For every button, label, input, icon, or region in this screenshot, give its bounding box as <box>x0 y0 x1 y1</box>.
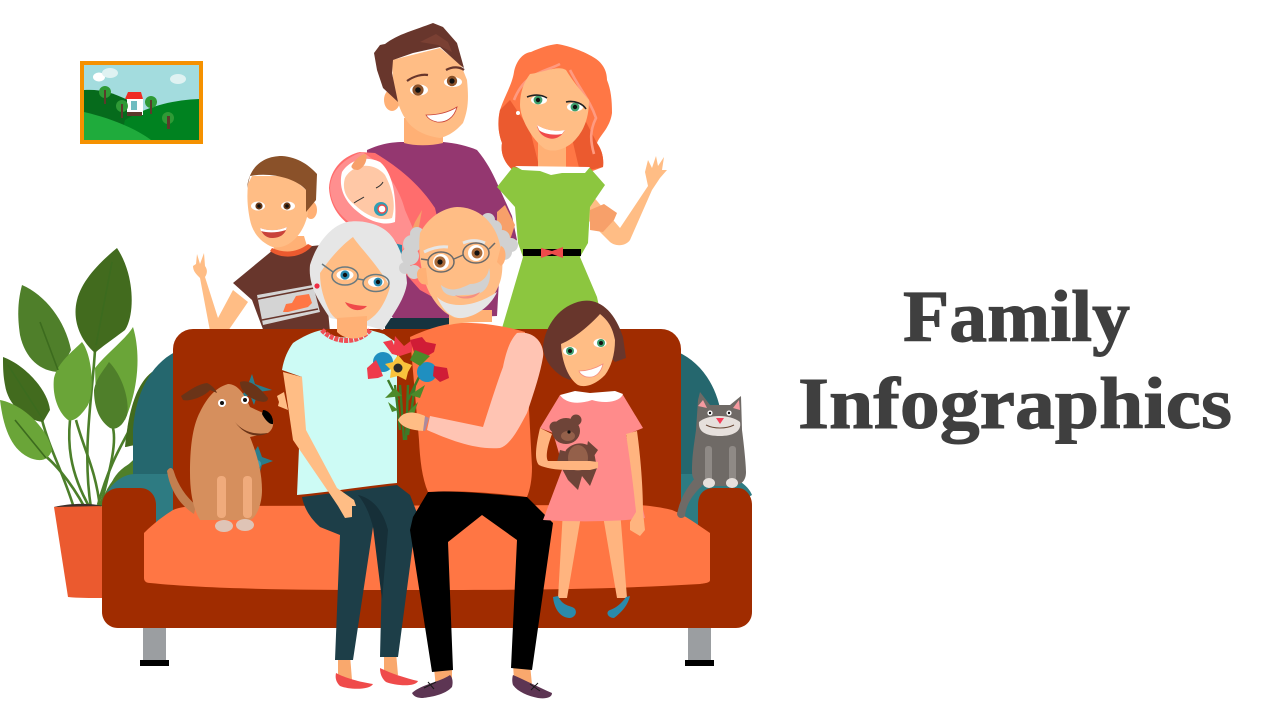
girl left arm <box>536 428 598 470</box>
father pants band <box>385 318 449 332</box>
boy mouth <box>260 227 287 238</box>
boy eyes <box>251 202 295 210</box>
girl hair back <box>543 301 626 380</box>
grandmother shoes <box>336 668 418 689</box>
cat muzzle <box>699 416 740 436</box>
grandmother <box>277 221 418 689</box>
grandfather neck <box>449 310 492 325</box>
dog tail <box>167 468 196 514</box>
boy hair <box>247 156 317 212</box>
teddy bear <box>550 414 598 490</box>
grandfather ankles <box>434 664 532 688</box>
grandmother glasses <box>322 264 389 292</box>
dog <box>167 374 273 532</box>
father hand on baby <box>405 210 422 250</box>
grandfather shoes <box>412 675 552 698</box>
grandfather <box>399 207 553 698</box>
baby wrap <box>329 152 455 300</box>
father hair <box>374 23 464 102</box>
grandfather hand and bouquet <box>367 336 449 440</box>
grandmother shirt <box>282 330 397 495</box>
grandfather hand behind grandmother <box>277 392 288 410</box>
sofa frame <box>102 329 752 666</box>
girl collar <box>560 391 623 403</box>
left leg <box>140 628 169 666</box>
girl eyes <box>563 338 606 356</box>
girl shoes <box>553 596 630 618</box>
grandfather ears <box>417 246 506 285</box>
grandfather moustache <box>441 268 490 296</box>
girl dress <box>540 395 645 521</box>
dog toys <box>238 374 273 478</box>
father face <box>392 48 468 138</box>
flowers <box>367 336 449 382</box>
grandfather arm <box>427 333 543 448</box>
grandfather cuff <box>416 414 429 431</box>
grandfather pants <box>410 492 553 672</box>
grandmother arm <box>283 372 356 518</box>
mother belt <box>523 247 581 258</box>
grandfather head <box>419 207 502 318</box>
father ear <box>384 89 400 111</box>
sofa seat <box>144 505 710 590</box>
grandmother pants <box>302 485 417 660</box>
dog face <box>218 396 273 435</box>
girl face <box>561 314 615 386</box>
dog ears <box>181 381 268 402</box>
sofa back <box>173 329 681 569</box>
mother eyes <box>516 95 586 115</box>
baby head <box>341 159 395 224</box>
bouquet stems <box>388 375 420 440</box>
sofa back cushions teal <box>107 352 752 525</box>
grandmother lips <box>345 302 367 310</box>
mother neck <box>538 136 566 168</box>
grandmother necklace <box>322 330 370 340</box>
boy neck <box>272 236 307 253</box>
mother dress <box>497 167 605 335</box>
boy ear <box>305 201 317 219</box>
mother hair <box>498 44 612 172</box>
boy arm <box>193 253 248 331</box>
left arm <box>102 488 156 570</box>
title: Infographics <box>798 363 1232 444</box>
mother raised arm <box>586 156 667 245</box>
father neck <box>404 118 443 145</box>
baby <box>329 152 455 300</box>
father shirt <box>365 142 517 318</box>
grandfather eyes and glasses <box>421 241 495 272</box>
boy head <box>247 176 308 247</box>
picture frame <box>80 61 203 144</box>
shirt stripe <box>257 285 320 325</box>
girl right arm <box>626 431 645 536</box>
cat <box>677 392 746 518</box>
cat face <box>706 410 734 428</box>
girl legs <box>558 510 627 598</box>
baby pacifier <box>354 182 388 216</box>
mother smile <box>537 125 565 139</box>
grandmother face <box>320 237 390 324</box>
girl <box>536 301 645 618</box>
dog body <box>190 384 273 520</box>
grandfather side hair <box>399 213 518 279</box>
cat legs <box>703 446 738 488</box>
grandfather vest <box>410 323 532 497</box>
right arm <box>698 488 752 570</box>
boy <box>193 156 330 332</box>
father <box>365 23 517 332</box>
grandfather beard <box>437 292 497 318</box>
grandmother legs <box>338 652 398 680</box>
mother face <box>520 68 589 151</box>
title <box>798 276 1232 444</box>
girl smile <box>579 364 603 377</box>
hand <box>398 413 425 431</box>
sofa base <box>102 560 752 628</box>
mother <box>497 44 667 335</box>
boy shirt <box>233 245 330 332</box>
father smile <box>426 107 457 122</box>
father eyes <box>407 67 464 96</box>
cat body <box>692 392 746 486</box>
dog legs <box>215 476 254 532</box>
right leg <box>685 628 714 666</box>
title: Family <box>903 276 1130 357</box>
grandmother hair <box>310 221 407 330</box>
cat tail <box>677 478 702 518</box>
baby curl <box>351 154 367 170</box>
potted plant <box>0 248 155 598</box>
